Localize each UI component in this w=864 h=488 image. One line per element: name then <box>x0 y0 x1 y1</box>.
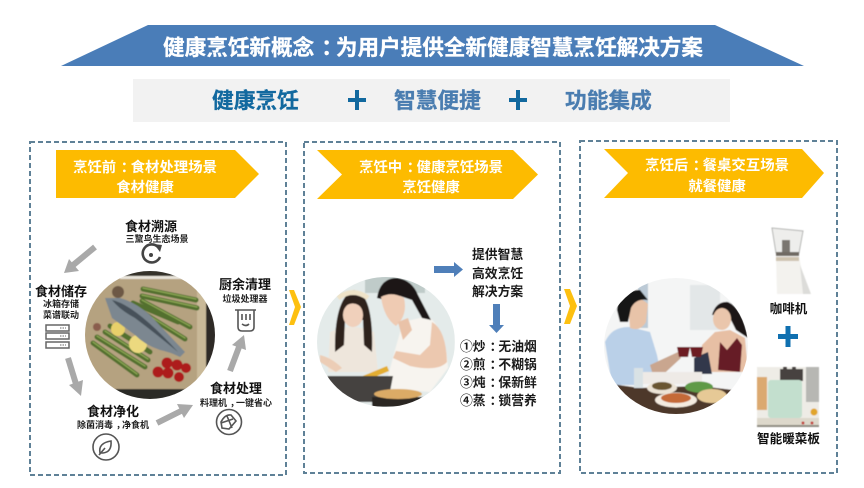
product: smart warming board: 智能暖菜板 <box>757 431 820 446</box>
heading: after cooking: 烹饪后 ：餐桌交互场景 <box>645 156 789 174</box>
product: smart warming board <box>757 367 820 446</box>
step: processing: 食材处理 <box>210 381 262 396</box>
list: cooking modes: ②煎 ：不糊锅 <box>460 357 537 372</box>
step: traceability <box>125 219 189 262</box>
step: purification: 除菌消毒 ，净食机 <box>77 419 149 430</box>
step: storage: 冰箱存储 <box>43 298 79 309</box>
arrow: right <box>434 262 463 277</box>
title banner: 健康烹饪新概念 ：为用户提供全新健康智慧烹饪解决方案 <box>163 35 703 60</box>
step: waste cleanup: 厨余清理 <box>219 277 271 292</box>
subtitle bar: 功能集成 <box>565 88 652 113</box>
photo: couple dining <box>600 275 750 420</box>
step: purification: 食材净化 <box>87 404 139 419</box>
photo: fish and asparagus <box>85 271 215 399</box>
step: storage: 食材储存 <box>35 284 87 299</box>
product: coffee machine: 咖啡机 <box>770 301 808 316</box>
heading: after cooking <box>604 149 824 198</box>
heading: during cooking <box>317 150 538 199</box>
text: smart solution: 提供智慧 <box>472 247 523 262</box>
heading: during cooking: 烹饪健康 <box>402 178 460 196</box>
plus sign <box>778 326 798 347</box>
step: traceability: 三黧鸟生态场景 <box>125 233 189 244</box>
heading: during cooking: 烹饪中 ：健康烹饪场景 <box>359 158 503 176</box>
arrow: down <box>489 304 504 333</box>
text: smart solution <box>472 247 523 299</box>
title banner <box>61 25 804 66</box>
heading: before cooking: 烹饪前 ：食材处理场景 <box>73 158 217 176</box>
step: processing: 料理机 ，一键省心 <box>200 397 272 408</box>
step: processing <box>200 381 272 434</box>
heading: after cooking: 就餐健康 <box>688 177 746 195</box>
subtitle bar: 智慧便捷 <box>394 88 481 113</box>
list: cooking modes: ①炒 ：无油烟 <box>460 339 537 354</box>
heading: before cooking: 食材健康 <box>116 178 174 196</box>
subtitle bar: 健康烹饪 <box>212 88 299 113</box>
list: cooking modes: ④蒸 ：锁营养 <box>460 393 537 408</box>
step: storage: 菜谱联动 <box>43 309 79 320</box>
heading: before cooking <box>56 150 259 198</box>
step: waste cleanup: 垃圾处理器 <box>222 293 268 304</box>
list: cooking modes <box>460 339 537 408</box>
step: purification <box>77 404 149 460</box>
product: coffee machine <box>770 228 811 316</box>
panel: before cooking <box>30 142 286 475</box>
list: cooking modes: ③炖 ：保新鲜 <box>460 375 537 390</box>
subtitle bar <box>133 79 730 122</box>
photo: mother and daughter cooking <box>315 275 455 410</box>
cycle arrows <box>64 247 246 423</box>
panel: after cooking <box>580 141 837 473</box>
step: storage <box>35 284 87 348</box>
step: waste cleanup <box>219 277 271 331</box>
chevron between panels 1 and 2 <box>289 290 301 325</box>
text: smart solution: 解决方案 <box>472 284 523 299</box>
step: traceability: 食材溯源 <box>125 219 177 234</box>
text: smart solution: 高效烹饪 <box>472 266 523 281</box>
panel: during cooking <box>304 142 560 473</box>
chevron between panels 2 and 3 <box>564 289 577 324</box>
